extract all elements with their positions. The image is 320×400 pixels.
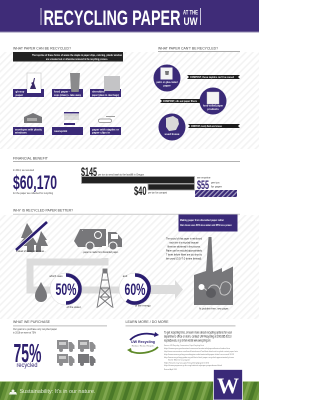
black note bar: are screened out or otherwise removed in the recycling process.: [46, 57, 108, 61]
icon: water drop: [35, 282, 47, 302]
chart: 60 percent energy: 60%: [124, 280, 146, 299]
logo: UW Recycling: UW Recycling: [131, 340, 155, 344]
bar: landfill cost: $145: [81, 165, 97, 179]
item: used tissue: used tissue: [165, 132, 180, 136]
text: contact information: [164, 330, 233, 342]
logo: UW Recycling: [127, 332, 159, 353]
item: paper or glass coated paper: paint- or glue-coated: [156, 80, 178, 84]
callout: water and power savings: [178, 214, 238, 232]
text: purchase goal: Our goal is to purchase only recycled paper: [13, 327, 57, 331]
stat: 75 percent recycled: [14, 338, 42, 369]
ribbon: compost: COMPOST, these napkins can't be reused: [190, 75, 234, 79]
text: purchase goal: [13, 327, 57, 334]
stat: 75 percent recycled: 75%: [14, 338, 42, 368]
item: food soiled paper: food-soiled paper: [203, 104, 223, 108]
item: shredded paper: shredded: [92, 90, 105, 94]
item: newsprint: newsprint: [54, 129, 67, 133]
item: cups: [52, 73, 83, 97]
text: sources: Revised April 2015: [164, 368, 178, 371]
item: paper or glass coated paper: [154, 64, 180, 92]
icon: sustainability: [9, 390, 17, 394]
panel: what paper can't be recycled: [154, 46, 240, 140]
bar: landfill cost: per ton to send trash to the landfill in Oregon: [98, 172, 144, 176]
bar: paper revenue: per ton: [211, 180, 220, 184]
stat: total received: In 2014, we received: [13, 168, 34, 172]
title: RECYCLING PAPER: [44, 6, 181, 30]
text: sources: http://www.uwrecycling.washington.edu/materials/paper.shtml accessed 2015: [164, 353, 235, 356]
footer band: [0, 370, 259, 400]
text: purchase goal: in 2016 we were at 75%: [13, 330, 36, 334]
UW logo: W: [217, 373, 239, 398]
panel: what we purchase: [13, 320, 107, 369]
text: sources: http://www.recycling-guide.org.uk/facts.html paper recycled approximately times: [164, 356, 234, 359]
item: glossy paper: [13, 73, 44, 97]
panel: why is recycled paper better: [13, 208, 240, 310]
title suffix: at the UW: [183, 10, 198, 28]
stat: total received: [13, 168, 57, 195]
footer slogan: Sustainability: It's in our nature.: [20, 389, 96, 395]
process pipe: [30, 258, 180, 290]
arrow: [150, 280, 183, 299]
icon: crossed out trees: [16, 222, 48, 253]
item: cups: food paper -: [54, 90, 70, 94]
item: paper or glass coated paper: paper: [163, 84, 171, 88]
text block: fiber life: The sound of that paper is reinforced: [166, 236, 202, 240]
item: cups: cups (clean) + take away: [54, 93, 81, 97]
chart: 60 percent energy: of the energy.: [135, 304, 151, 308]
chart: 60 percent energy: and: [123, 274, 128, 278]
chart: 50 percent water: of the water,: [67, 305, 82, 309]
panel: what paper can be recycled: [13, 46, 123, 135]
text: sources: from fibers to paper: [168, 358, 190, 362]
logo: UW Recycling: Reduce. Reuse. Recycle.: [132, 346, 155, 348]
ribbon: compost tissue: COMPOST, mostly fluids and viruses: [191, 124, 222, 128]
item: glossy paper: paper: [16, 93, 24, 97]
UW logo: [214, 370, 242, 400]
text block: fiber life: be used (3.5-7.0 times thread).: [166, 256, 202, 260]
heading: purchase: WHAT WE PURCHASE: [13, 320, 50, 324]
item: glossy paper: glossy: [16, 90, 25, 94]
item: food soiled paper: [200, 88, 226, 114]
text block: fiber life: Paper can be recycled approximately: [166, 248, 202, 252]
bar: landfill cost: [81, 165, 194, 184]
text: sources: http://www.ecy.wa.gov/recycling/paper.html: [164, 362, 210, 364]
text: sources: http://www.epa.gov/wastes/conserve/materials/paper/basics/index.htm: [164, 347, 230, 350]
black note bar: [13, 52, 123, 62]
title suffix: at the UW: AT THE: [183, 10, 198, 16]
text block: fiber life: 7 times before fibers are too short to: [166, 252, 202, 256]
item: paper clip: paper with staples or: [92, 127, 120, 131]
stat: total received: for the paper we collected for recycling: [13, 191, 53, 195]
text: sources: http://www.conservatree.com/learn/EnviroIssues/TreeStats.shtml and recycled content paper facts: [164, 350, 238, 353]
icon: paper mill factory: [194, 237, 233, 310]
ribbon: compost oily paper: COMPOST, oils eat paper fibers: [163, 99, 197, 103]
panel: financial benefit: [13, 156, 240, 198]
heading: can be recycled: WHAT PAPER CAN BE RECYCLED?: [13, 46, 71, 50]
item: envelopes: envelopes with plastic: [15, 127, 42, 131]
callout: water and power savings: than trees uses 60% less water and 65% less power.: [180, 223, 232, 227]
icon: oil derrick: [97, 269, 113, 308]
item: paper clip: paper clips in: [92, 131, 110, 135]
text block: fiber life: [166, 236, 202, 260]
black note bar: The top-line of these forms of waste the staple in paper clips, coloring, plastic window: [32, 53, 122, 57]
heading: why better: WHY IS RECYCLED PAPER BETTER?: [13, 208, 73, 212]
text block: fiber life: each time it is recycled because: [170, 240, 199, 244]
bar: compost cost: [134, 184, 194, 198]
item: paper clip: [90, 116, 121, 135]
header banner: [0, 0, 259, 32]
panel: learn more: [126, 319, 238, 371]
bar: paper revenue: [195, 176, 237, 197]
bar: compost cost: per ton for compost: [148, 190, 167, 194]
stat: 75 percent recycled: recycled: [16, 363, 38, 369]
text: sources: [164, 344, 238, 371]
chart: 50 percent water: which uses: [49, 274, 63, 278]
title suffix: at the UW: UW: [184, 16, 198, 28]
text block: fiber life: fibers are shortened in the process.: [168, 244, 201, 248]
item: envelopes: [13, 113, 44, 135]
stat: total received: $60,170: [13, 173, 57, 194]
text: sources: Sources: UW Recycling, Conservatree, Paper Recycling Facts: [164, 344, 204, 347]
item: shredded paper: paper (place in clear bags): [92, 93, 119, 97]
icon: paper mill factory: At problem-free, new paper.: [199, 306, 229, 310]
bar: paper revenue: $55: [197, 180, 209, 192]
bar: paper revenue: we receive: [197, 176, 211, 180]
item: envelopes: windows: [14, 131, 27, 135]
bar: paper revenue: for paper: [211, 184, 222, 188]
heading: learn more: LEARN MORE / DO MORE: [126, 319, 169, 324]
heading: cannot be recycled: WHAT PAPER CAN'T BE RECYCLED?: [158, 46, 218, 50]
icon: recycling truck: ...paper is made from discarded paper.: [82, 250, 119, 254]
icon: delivery trucks: [57, 340, 96, 366]
item: food soiled paper: products: [207, 107, 219, 111]
item: shredded paper: [90, 76, 121, 97]
chart: 60 percent energy: [119, 273, 151, 308]
chart: 50 percent water: [49, 273, 82, 309]
icon: crossed out trees: Instead of cutting down trees...: [16, 249, 46, 253]
bar: compost cost: $40: [134, 184, 147, 198]
text: contact information: recycle@uw.edu, or go to their website www.uwrecycling.com.: [164, 338, 211, 342]
callout: water and power savings: Making paper from discarded paper rather: [180, 218, 225, 222]
chart: 50 percent water: 50%: [56, 280, 76, 299]
icon: recycling truck: [74, 229, 122, 254]
text: sources: http://www.paperrecycles.org/statistics/paper-paperboard.html: [164, 364, 223, 367]
heading: financial benefit: FINANCIAL BENEFIT: [13, 156, 49, 160]
